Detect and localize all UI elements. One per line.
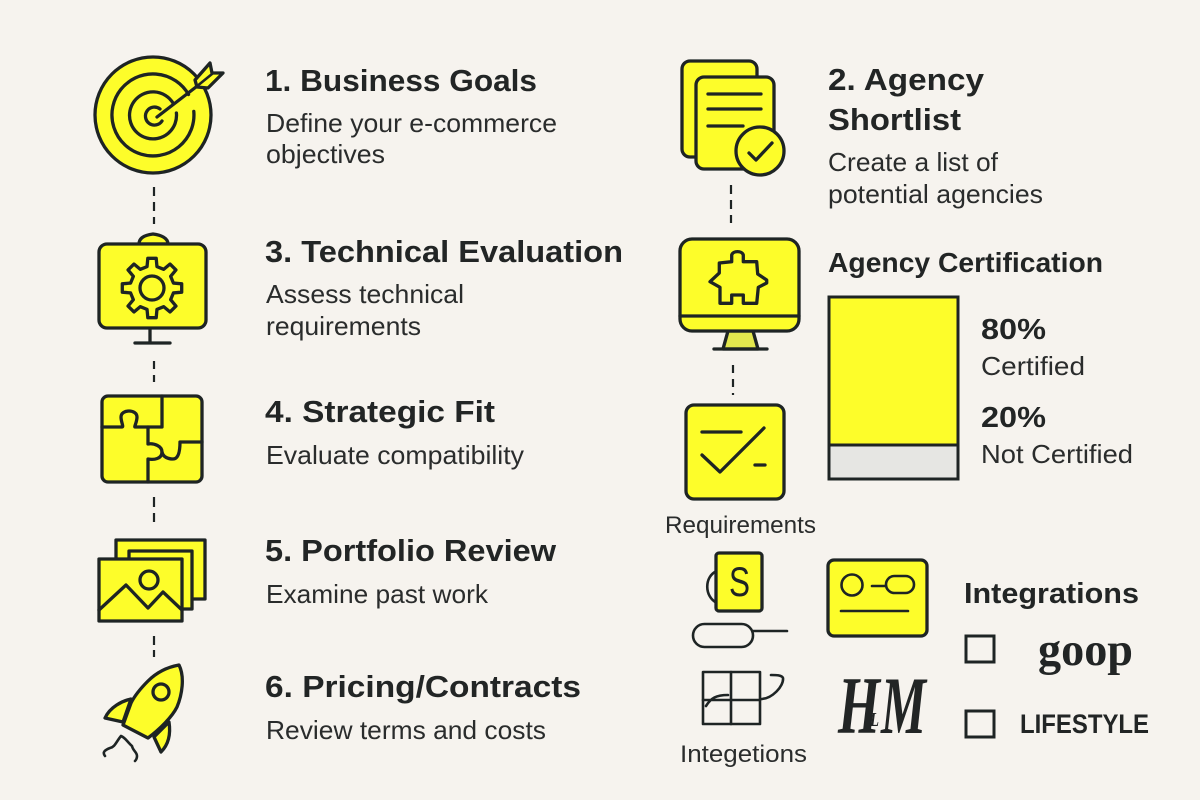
step 4 text: Evaluate compatibility [266,440,524,470]
panel: agency certification [828,247,1133,479]
step 2 text: Shortlist [828,102,961,137]
logo: goop: goop [1038,624,1133,676]
icon: stacked images [99,540,205,621]
step 2 text: Create a list of [828,147,999,177]
icon: integrations grid [703,672,783,724]
checkbox: lifestyle [966,711,994,737]
step 4 text [265,394,524,470]
icon: documents with check [682,61,784,175]
connector: documents to monitor [730,185,732,223]
connector: target to gear [153,187,155,224]
icon: rocket [104,665,182,761]
step 1 text [265,63,557,169]
logo: H&M: M [880,660,928,751]
label: requirements: Requirements [665,512,816,539]
heading: integrations: Integrations [964,578,1139,610]
icon: gear on presentation board [99,234,206,343]
icon: integration card [828,560,927,636]
icon: pricing tag with dollar sign [693,553,787,647]
connector: portfolio to rocket [153,636,155,657]
legend: certified [981,314,1085,381]
heading: agency certification: Agency Certification [828,247,1103,278]
step 5 text: Examine past work [266,579,489,609]
logo: H&M: L [869,709,879,731]
label: integetions: Integetions [680,741,807,768]
logo: H&M: H [837,660,881,751]
legend: not certified [981,402,1133,469]
step 3 text: 3. Technical Evaluation [265,234,623,269]
step 2 text: 2. Agency [828,62,985,97]
legend: certified: Certified [981,351,1085,381]
icon: target with arrow [95,57,223,173]
checkbox: goop [966,636,994,662]
step 2 text [828,62,1043,209]
icon: pricing tag with dollar sign: S [729,558,750,605]
chart: stacked certification bar [829,297,958,479]
step 2 text: potential agencies [828,179,1043,209]
step 3 text: Assess technical [266,279,464,309]
connector: puzzle to portfolio [153,497,155,522]
panel: integrations list [964,578,1149,739]
connector: monitor to requirements [732,365,734,395]
legend: certified: 80% [981,314,1046,346]
icon: requirements checklist [686,405,784,499]
step 6 text: Review terms and costs [266,715,546,745]
step 3 text [265,234,623,341]
step 1 text: 1. Business Goals [265,63,537,98]
step 4 text: 4. Strategic Fit [265,394,495,429]
step 6 text [265,669,581,745]
step 1 text: Define your e-commerce [266,108,557,138]
step 5 text [265,533,557,609]
connector: gear to puzzle [153,361,155,382]
logo: lifestyle: LIFESTYLE [1020,709,1149,739]
step 1 text: objectives [266,139,385,169]
legend: not certified: Not Certified [981,439,1133,469]
icon: monitor with puzzle piece [680,239,799,349]
legend: not certified: 20% [981,402,1046,434]
step 3 text: requirements [266,311,421,341]
step 6 text: 6. Pricing/Contracts [265,669,581,704]
icon: four piece puzzle [102,396,202,482]
step 5 text: 5. Portfolio Review [265,533,557,568]
